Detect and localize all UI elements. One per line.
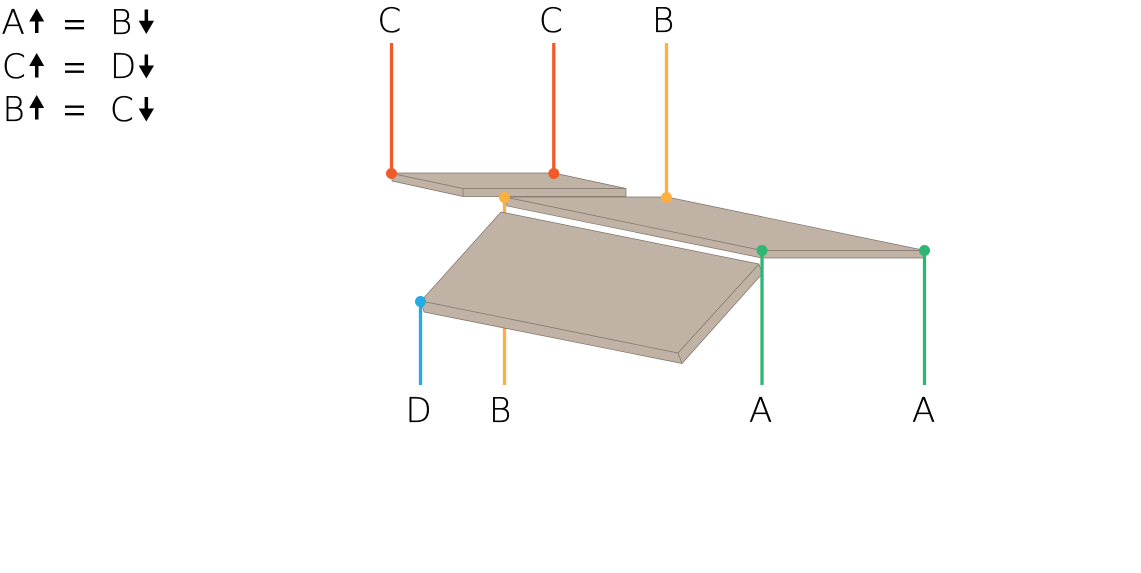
line C left with dot (386, 43, 397, 179)
point B on middle plate (499, 192, 510, 203)
legend row 3: B (2, 90, 25, 130)
line D with dot (415, 296, 426, 385)
line B upper segment (503, 198, 506, 213)
label C left: C (378, 1, 401, 41)
line B lower segment (503, 320, 506, 385)
legend row 1: B (110, 3, 132, 43)
legend row 2: C (2, 47, 26, 87)
label B top: B (652, 1, 674, 41)
label A right: A (912, 391, 935, 431)
legend row 1 (2, 3, 154, 43)
legend row 3 (2, 90, 154, 130)
line C right with dot (548, 43, 559, 179)
legend row 1: A (2, 3, 25, 43)
lower plate (421, 212, 762, 364)
line A left with dot (756, 245, 768, 385)
label C right: C (539, 1, 563, 41)
line A right with dot (919, 245, 930, 385)
legend row 3: C (110, 90, 134, 130)
legend row 2: D (110, 47, 136, 87)
top plate (392, 173, 626, 196)
label A left: A (749, 391, 772, 431)
label D: D (406, 391, 432, 431)
label B bottom: B (489, 391, 511, 431)
line B right with dot (661, 43, 672, 203)
legend row 2 (2, 47, 154, 87)
middle plate (505, 197, 925, 258)
legend: lever equalities (2, 3, 154, 130)
